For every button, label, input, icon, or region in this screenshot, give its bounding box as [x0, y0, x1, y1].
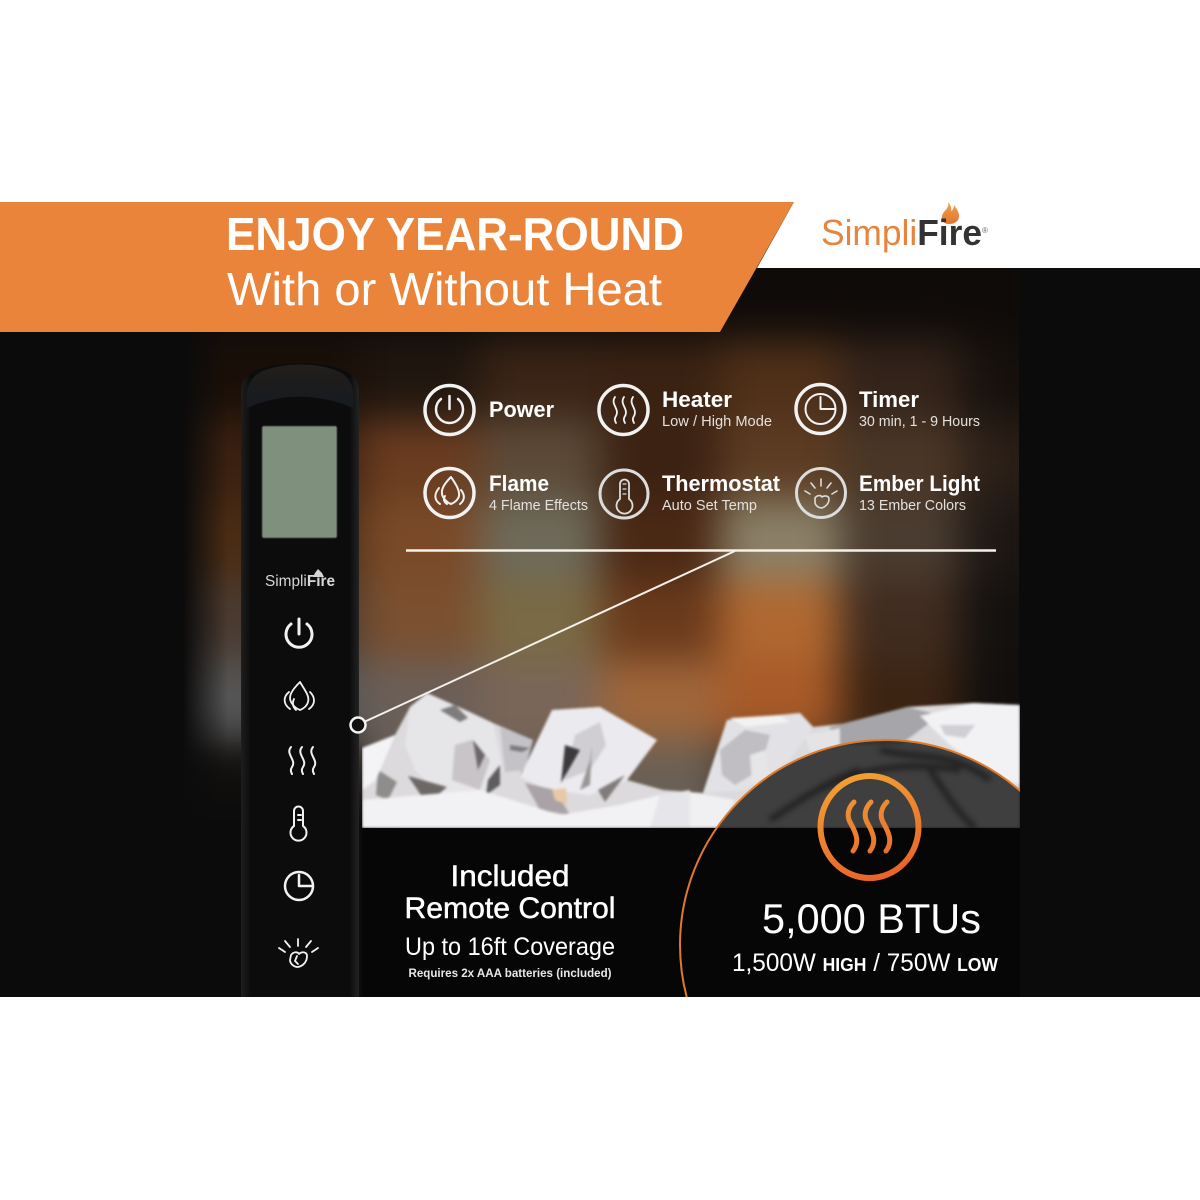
- remote icon: timer: [285, 872, 313, 900]
- feature: ember light: [796, 468, 981, 518]
- remote control caption: [404, 860, 616, 980]
- feature: ember light: 13 Ember Colors: [859, 497, 966, 514]
- SimpliFire logo: ®: [982, 226, 988, 235]
- feature: thermostat: [600, 470, 781, 518]
- remote control caption: Requires 2x AAA batteries (included): [408, 966, 612, 980]
- white logo band: [757, 202, 1200, 268]
- black background band: [0, 202, 1200, 997]
- remote icon: thermometer: [290, 806, 306, 841]
- feature: heater: [599, 386, 772, 434]
- BTU text: 5,000 BTUs: [762, 895, 981, 942]
- logo flame: [942, 202, 959, 224]
- feature: flame: Flame: [489, 471, 549, 496]
- remote logo: SimpliFire: [265, 573, 335, 590]
- orange header banner: [0, 202, 794, 332]
- remote control caption: Remote Control: [404, 892, 616, 925]
- feature: power: Power: [489, 397, 554, 422]
- remote icon: heat waves: [289, 747, 315, 774]
- feature: power: [425, 386, 554, 434]
- feature: timer: Timer: [859, 387, 919, 412]
- BTU text: [732, 895, 998, 977]
- SimpliFire logo: SimpliFire: [821, 212, 982, 253]
- feature: thermostat: Auto Set Temp: [662, 497, 757, 514]
- feature: ember light: Ember Light: [859, 471, 981, 496]
- remote control caption: Included: [450, 860, 570, 893]
- BTU text: 1,500W HIGH / 750W LOW: [732, 949, 998, 977]
- feature: flame: [425, 468, 588, 518]
- remote body: [241, 363, 359, 997]
- feature: timer: [796, 384, 980, 434]
- remote control: [241, 363, 359, 997]
- feature: heater: Low / High Mode: [662, 413, 772, 430]
- feature: flame: 4 Flame Effects: [489, 497, 588, 514]
- feature: timer: 30 min, 1 - 9 Hours: [859, 413, 980, 430]
- remote icon: flame: [285, 682, 314, 710]
- feature: thermostat: Thermostat: [662, 471, 781, 496]
- headline: [226, 208, 684, 315]
- remote icon: ember: [279, 939, 318, 967]
- callout leader line: [350, 550, 996, 732]
- remote top cap: [246, 364, 354, 408]
- feature: heater: Heater: [662, 387, 732, 412]
- crystal ember bed: [362, 693, 1020, 828]
- fire photo background: [188, 312, 1019, 828]
- remote control caption: Up to 16ft Coverage: [405, 933, 615, 961]
- remote display: [262, 426, 337, 538]
- heat icon: orange ring: [820, 776, 918, 878]
- headline: With or Without Heat: [227, 263, 662, 315]
- bottom black strip: [362, 828, 1020, 997]
- BTU circle panel: [679, 739, 1020, 997]
- headline: ENJOY YEAR-ROUND: [226, 208, 684, 260]
- remote icon: power: [286, 619, 312, 647]
